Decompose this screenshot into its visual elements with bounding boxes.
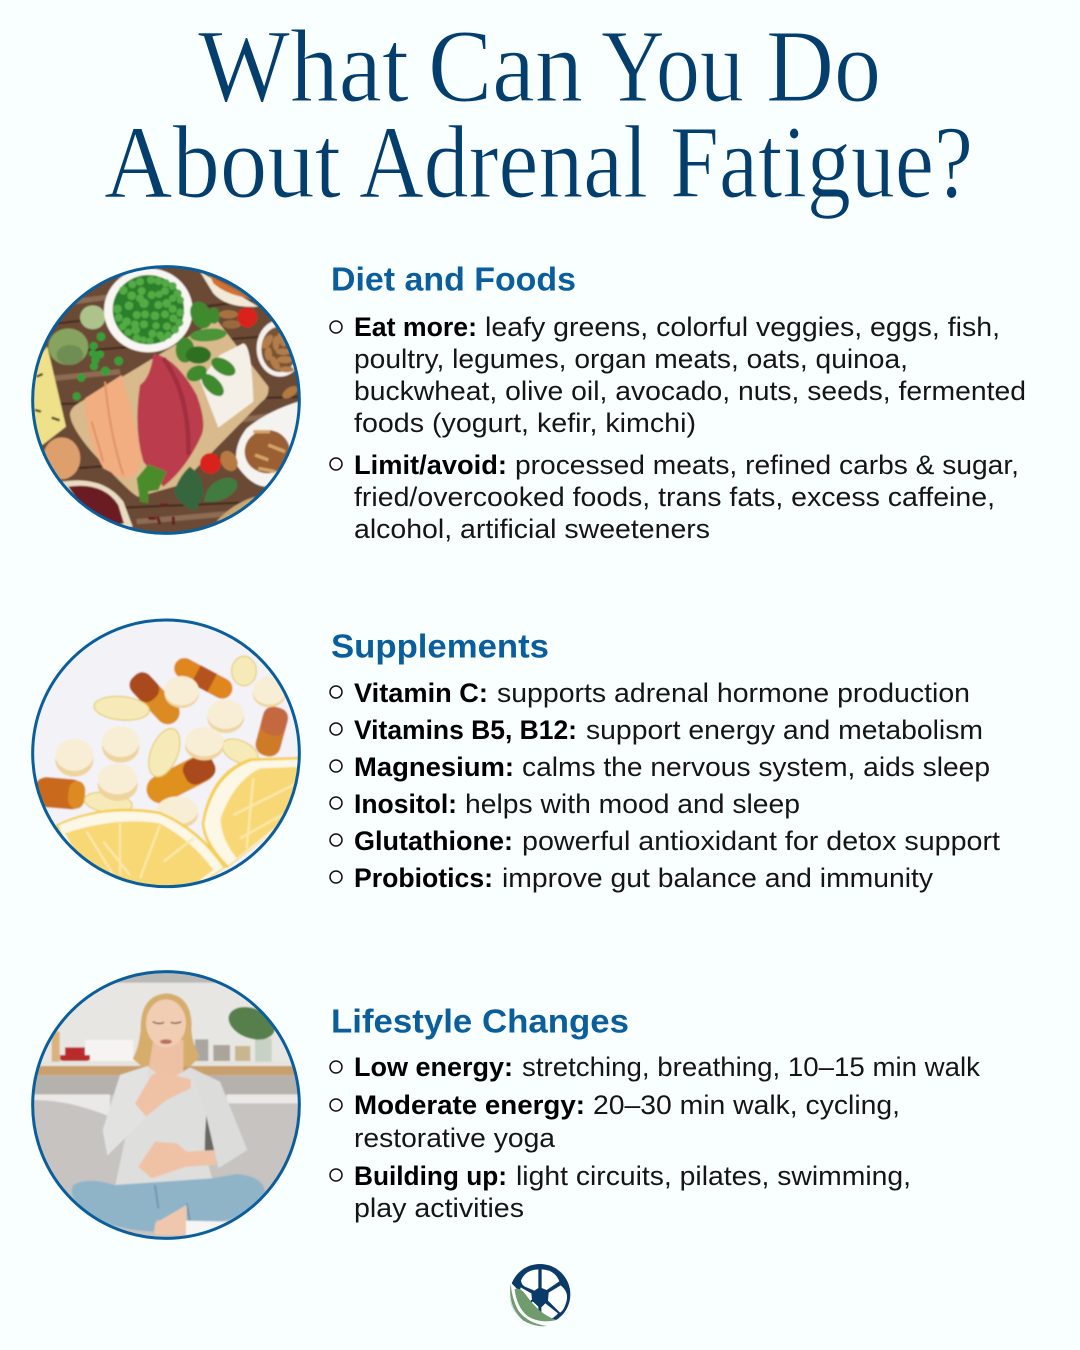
fish fillet <box>200 343 253 428</box>
neck <box>148 1039 184 1076</box>
heading: supplements: Supplements <box>331 628 549 666</box>
jeans <box>72 1174 265 1232</box>
list: supplements: support energy and metabolism <box>586 715 983 745</box>
foot and sock <box>155 1205 187 1235</box>
list: diet and foods: foods (yogurt, kefir, kimchi) <box>354 408 696 438</box>
hair <box>133 993 200 1067</box>
counter <box>27 1061 307 1066</box>
lettuce under beef <box>137 464 167 503</box>
arm gap <box>204 1116 214 1152</box>
herbs <box>176 298 239 400</box>
chicken <box>85 375 142 479</box>
list: diet and foods: fried/overcooked foods, trans fats, excess caffeine, <box>354 482 995 512</box>
tomatoes <box>237 307 257 327</box>
list: supplements: Inositol: <box>354 789 457 819</box>
list: supplements <box>330 678 1001 893</box>
cheese <box>32 347 66 448</box>
list: supplements: supports adrenal hormone production <box>497 678 970 708</box>
softgels <box>83 656 262 816</box>
leaf <box>509 1282 559 1326</box>
list: supplements: improve gut balance and immunity <box>502 863 934 893</box>
loose peas <box>73 332 123 400</box>
sofa <box>34 1095 298 1237</box>
list: lifestyle changes: restorative yoga <box>354 1123 556 1153</box>
plant <box>255 1038 272 1062</box>
logo <box>509 1264 570 1326</box>
title: You <box>601 9 744 124</box>
list: lifestyle changes: play activities <box>354 1193 524 1223</box>
egg <box>43 437 80 479</box>
photo: healthy foods <box>27 262 307 542</box>
list: supplements: calms the nervous system, aids sleep <box>522 752 990 782</box>
list: diet and foods: Eat more: <box>354 312 477 342</box>
title: Can <box>428 9 583 124</box>
broccoli <box>48 328 88 365</box>
bean bowl <box>62 479 134 528</box>
almonds bowl <box>255 320 295 378</box>
list: diet and foods: alcohol, artificial sweeteners <box>354 514 710 544</box>
lemon slices <box>202 757 303 868</box>
photo: woman breathing <box>27 967 307 1248</box>
bowl of peas <box>104 268 193 352</box>
title: What <box>198 9 409 124</box>
left sleeve <box>103 1066 148 1156</box>
kitchen items <box>60 1047 90 1061</box>
beef <box>137 353 203 487</box>
list: supplements: powerful antioxidant for detox support <box>522 826 1001 856</box>
tablets <box>55 679 286 828</box>
photo: supplements <box>27 615 307 895</box>
list: diet and foods: leafy greens, colorful veggies, eggs, fish, <box>485 312 1000 342</box>
list: supplements: Probiotics: <box>354 863 493 893</box>
list: diet and foods: Limit/avoid: <box>354 450 507 480</box>
title <box>104 9 973 220</box>
board <box>70 320 268 497</box>
list: supplements: helps with mood and sleep <box>465 789 800 819</box>
heading: diet and foods: Diet and Foods <box>331 262 576 298</box>
list: lifestyle changes: stretching, breathing, 10–15 min walk <box>522 1052 980 1082</box>
list: diet and foods <box>330 312 1026 544</box>
list: lifestyle changes: Low energy: <box>354 1052 513 1082</box>
list: lifestyle changes: Building up: <box>354 1161 507 1191</box>
list: lifestyle changes <box>330 1052 980 1223</box>
title: Do <box>766 9 881 124</box>
list: lifestyle changes: Moderate energy: <box>354 1090 585 1120</box>
face <box>146 999 186 1047</box>
list: lifestyle changes: 20–30 min walk, cycling, <box>593 1090 900 1120</box>
list: supplements: Magnesium: <box>354 752 514 782</box>
title: Fatigue? <box>670 105 973 220</box>
walnut bowl <box>236 402 298 487</box>
title: Adrenal <box>359 105 648 220</box>
list: supplements: Vitamin C: <box>354 678 488 708</box>
capsules <box>128 671 181 726</box>
spinach <box>174 467 203 511</box>
hands <box>135 1072 191 1117</box>
flower petals <box>520 1269 567 1323</box>
list: diet and foods: poultry, legumes, organ meats, oats, quinoa, <box>354 344 908 374</box>
list: lifestyle changes: light circuits, pilates, swimming, <box>516 1161 911 1191</box>
list: supplements: Vitamins B5, B12: <box>354 715 577 745</box>
title: About <box>104 105 341 220</box>
lentil bowl <box>200 272 258 307</box>
list: diet and foods: processed meats, refined carbs & sugar, <box>515 450 1019 480</box>
right sleeve <box>190 1067 247 1168</box>
list: supplements: Glutathione: <box>354 826 513 856</box>
heading: lifestyle changes: Lifestyle Changes <box>331 1004 629 1040</box>
list: diet and foods: buckwheat, olive oil, avocado, nuts, seeds, fermented <box>354 376 1026 406</box>
almonds <box>219 310 238 319</box>
shirt <box>115 1066 213 1187</box>
